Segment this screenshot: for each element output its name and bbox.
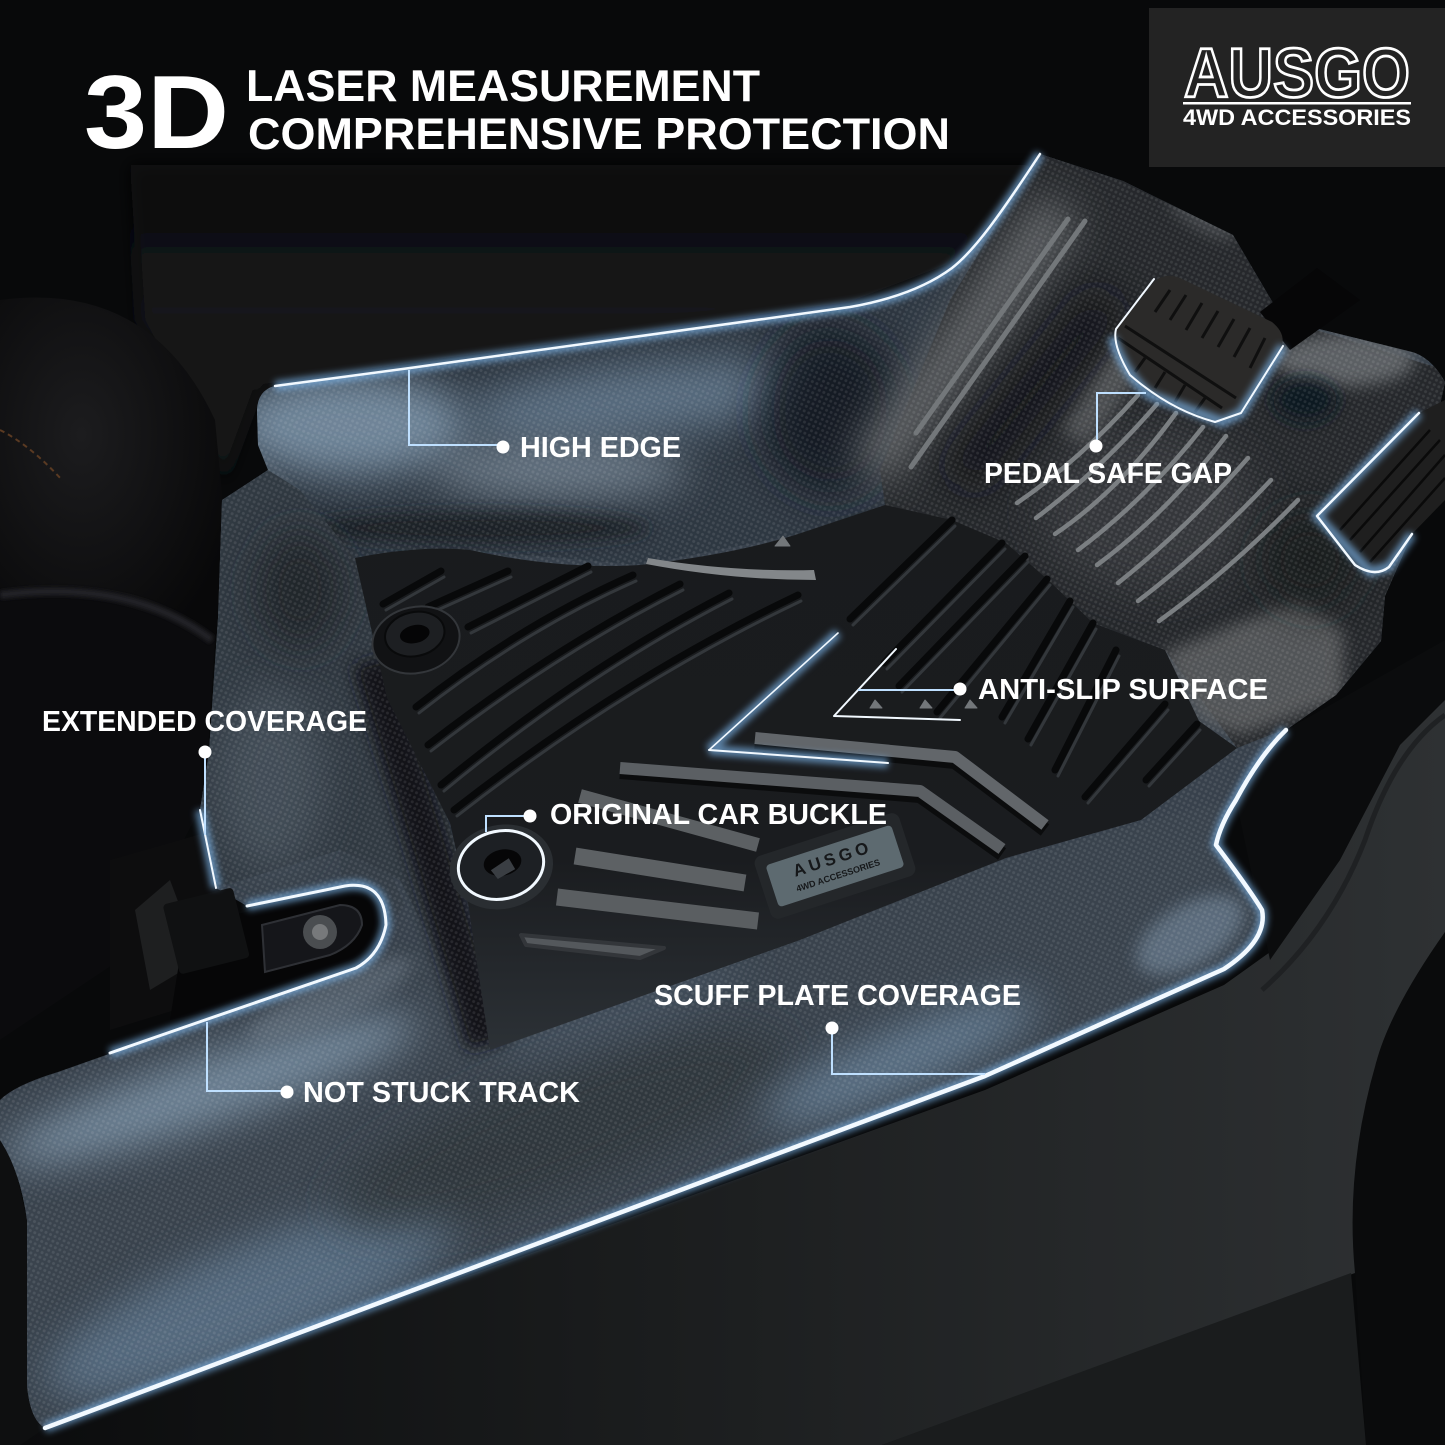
callout: not stuck track [207, 1022, 580, 1109]
callout: high edge [409, 370, 681, 464]
title: 3D [84, 55, 229, 171]
callout: extended coverage [42, 706, 367, 835]
brake pedal [1114, 268, 1360, 420]
AUSGO logo badge on mat [755, 814, 915, 906]
title: LASER MEASUREMENT [246, 62, 760, 111]
logo panel: AUSGO [1184, 34, 1410, 112]
floor ribs: grey chevrons and slabs [521, 536, 1045, 958]
scuff plate shading [0, 888, 1251, 1426]
callout: high edge: HIGH EDGE [520, 432, 681, 464]
accelerator pedal [1317, 400, 1445, 573]
central floor [355, 505, 1237, 1050]
title: COMPREHENSIVE PROTECTION [248, 110, 950, 159]
callout: anti-slip surface: ANTI-SLIP SURFACE [978, 674, 1268, 706]
callout: pedal safe gap [984, 393, 1232, 490]
callout: not stuck track: NOT STUCK TRACK [303, 1077, 580, 1109]
AUSGO logo badge on mat: 4WD ACCESSORIES [795, 857, 881, 894]
high edge wall [230, 260, 960, 565]
callout: scuff plate coverage: SCUFF PLATE COVERAGE [654, 980, 1021, 1012]
callout: extended coverage: EXTENDED COVERAGE [42, 706, 367, 738]
mat clip: upper [372, 606, 460, 674]
mat clip: lower [450, 824, 553, 910]
seat rail bracket [163, 887, 378, 1020]
callout: pedal safe gap: PEDAL SAFE GAP [984, 458, 1232, 490]
floor ribs: left dark channels [383, 520, 1200, 816]
right wall with long ribs [869, 154, 1445, 748]
title [84, 55, 950, 171]
callout: scuff plate coverage [654, 980, 1021, 1074]
left side wall [200, 470, 487, 1050]
right wall ribs [911, 219, 1298, 621]
callout: original car buckle: ORIGINAL CAR BUCKLE [550, 799, 887, 831]
logo panel [1149, 8, 1445, 167]
logo panel: 4WD ACCESSORIES [1183, 105, 1411, 130]
AUSGO logo badge on mat: AUSGO [791, 837, 875, 881]
